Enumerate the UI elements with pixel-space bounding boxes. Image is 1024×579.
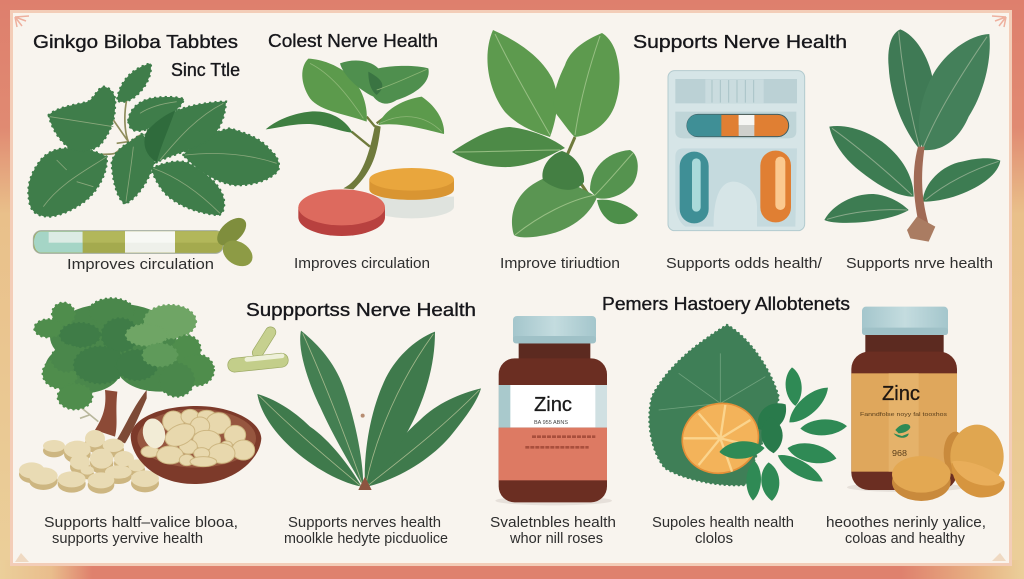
label small text: Fanndfolse noyy fal tooxhos [860,412,947,418]
caption: Svaletnbles health [490,515,616,531]
caption: heoothes nerinly yalice, [826,515,986,531]
illustration: bottle [847,307,964,492]
illustration: ginkgo leaves [28,63,279,217]
caption: Supports nerves health [288,515,441,531]
subheading: Sinc Ttle [171,60,240,80]
caption [652,515,794,547]
caption: Improves circulation [294,256,430,272]
icon: tablets [892,425,1005,501]
label: Zinc: Zinc [534,394,572,416]
panel: leaf with orange slice [602,294,850,547]
caption: Supoles health nealth [652,515,794,531]
heading: Colest Nerve Health [268,31,438,51]
label: Zinc: Zinc [882,383,920,405]
panel: long leaves with capsules [227,300,481,547]
caption: Supports haltf–valice blooa, [44,515,238,531]
caption [284,515,448,547]
icon: capsules [227,325,289,373]
caption: Supports nrve health [846,256,993,272]
illustration: long leaves [257,331,481,490]
panel: ginkgo tree with tablets and bowl [19,298,261,547]
illustration: plant [266,59,444,189]
panel: plant and tablets [266,31,454,272]
caption: Improves circulation [67,257,214,273]
label number: 968 [892,449,908,458]
caption: Improve tiriudtion [500,256,620,272]
icon: tablets [298,168,454,236]
icon: wooden bowl of nuts [131,406,261,484]
caption: clolos [695,531,733,547]
illustration: small leaves [719,367,847,502]
caption: moolkle hedyte picduolice [284,531,448,547]
heading: Supports Nerve Health [633,32,847,52]
caption: coloas and healthy [845,531,966,547]
illustration: zinc bottle [495,316,612,505]
caption: Supports odds health/ [666,256,823,272]
caption [826,515,986,547]
caption [44,515,238,547]
heading: Pemers Hastoery Allobtenets [602,294,850,314]
panel: zinc bottle [490,316,616,547]
panel: green leaves [452,30,638,272]
heading: Suppportss Nerve Health [246,300,476,320]
illustration: tree [34,298,214,443]
illustration: plant [824,29,1000,242]
caption: supports yervive health [52,531,203,547]
icon: stacked tablets [19,430,159,494]
illustration: leaf sprig [452,30,638,237]
caption [490,515,616,547]
panel: capsule blister pack [633,32,847,272]
panel: ginkgo leaves and capsule [28,32,279,273]
icon: blister pack [668,71,805,231]
icon: capsule tube [33,213,257,271]
heading: Ginkgo Biloba: Ginkgo Biloba Tabbtes [33,32,238,52]
label small text: BA 955 ABNS [534,420,569,426]
caption: whor nill roses [509,531,603,547]
illustration: serrated leaf [649,325,779,485]
panel: orange zinc bottle and tablets [826,307,1005,547]
panel: dark leaf plant [824,29,1000,272]
